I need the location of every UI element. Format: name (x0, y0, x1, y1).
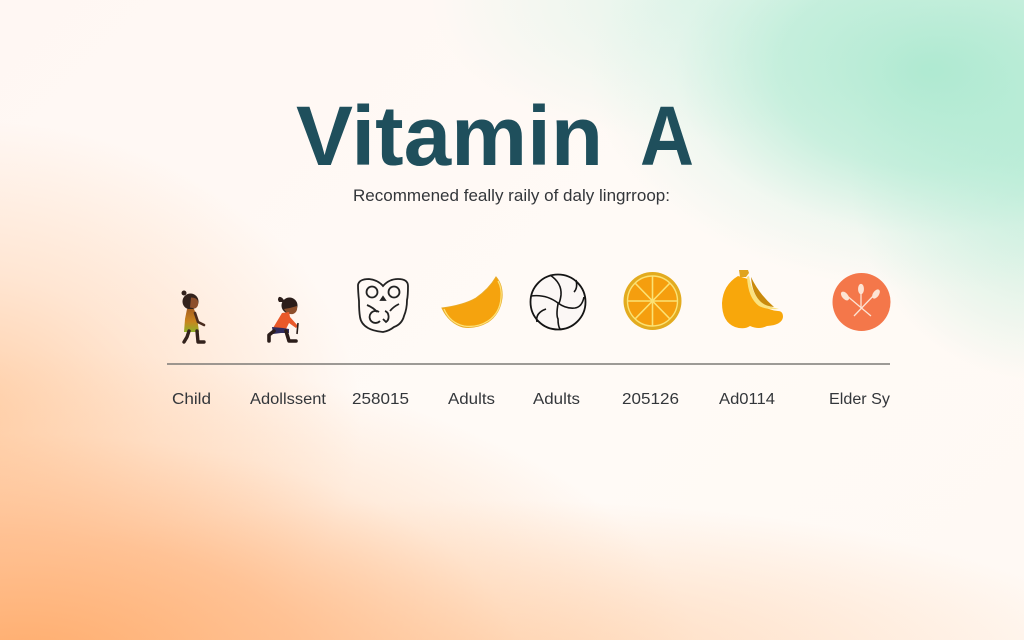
title letter A: A (640, 89, 694, 183)
icon: shield face (358, 279, 408, 332)
subtitle: Recommened feally raily of daly lingrroop: (353, 187, 670, 205)
label: ad0114: Ad0114 (719, 391, 775, 408)
label: child: Child (172, 391, 211, 408)
icon: orange slice (442, 277, 502, 327)
label: adults second: Adults (533, 391, 580, 408)
label: 205126: 205126 (622, 391, 679, 408)
label: elder: Elder Sy (829, 391, 890, 408)
icon: orange fruit (624, 272, 682, 330)
divider line (167, 363, 890, 365)
label: adolescent: Adollssent (250, 391, 327, 408)
icon: ball (530, 274, 586, 330)
icon: child (182, 290, 204, 342)
label: adults: Adults (448, 391, 495, 408)
icon: wheat circle (832, 273, 890, 331)
icon: banana bunch (722, 270, 783, 328)
title: Vitamin (296, 89, 603, 183)
icon: adolescent (269, 297, 298, 341)
label: 258015: 258015 (352, 391, 409, 408)
